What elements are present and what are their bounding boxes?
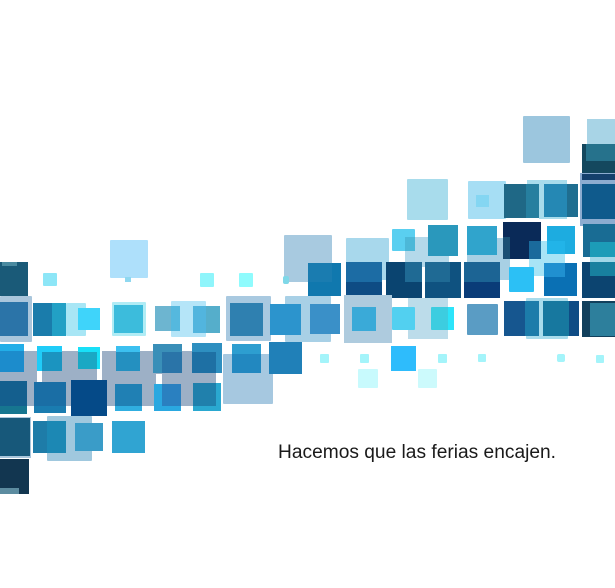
- row three squares: [0, 342, 302, 374]
- top scattered light squares: [43, 240, 253, 287]
- mosaic: right side of blue squares: [269, 116, 615, 388]
- row five and six squares: [0, 416, 145, 494]
- row two squares: [33, 296, 271, 341]
- upper light squares: [407, 116, 615, 220]
- lower small squares: [269, 342, 604, 388]
- right edge column: [580, 144, 615, 337]
- grey band squares: [0, 351, 273, 406]
- tagline: Hacemos que las ferias encajen.: [278, 442, 556, 463]
- row at y 225: [283, 222, 575, 284]
- row four squares: [0, 380, 221, 416]
- mosaic: left side of blue squares: [0, 240, 302, 494]
- upper dark squares: [504, 180, 578, 219]
- row at y 303: [270, 295, 579, 343]
- dark corner column: [0, 262, 32, 342]
- row at y 262: [308, 262, 577, 298]
